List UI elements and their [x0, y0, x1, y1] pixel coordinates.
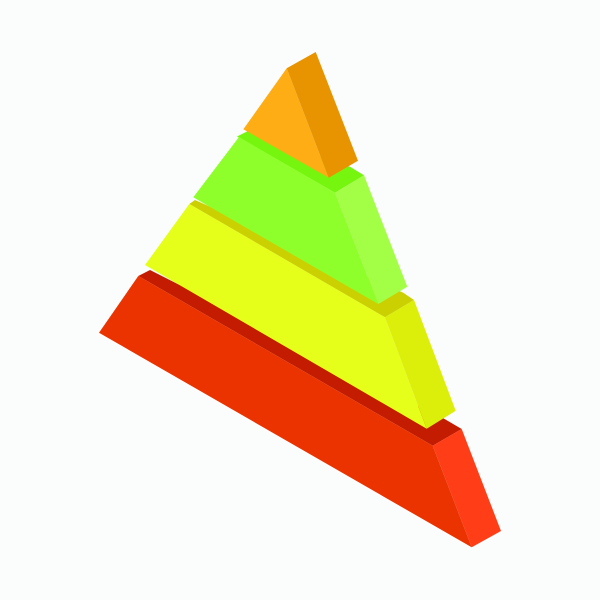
tier 1: orange top [243, 52, 358, 178]
tier 2: green [193, 131, 407, 304]
tier 3: yellow [145, 200, 456, 429]
tier 4: red base [99, 270, 501, 547]
